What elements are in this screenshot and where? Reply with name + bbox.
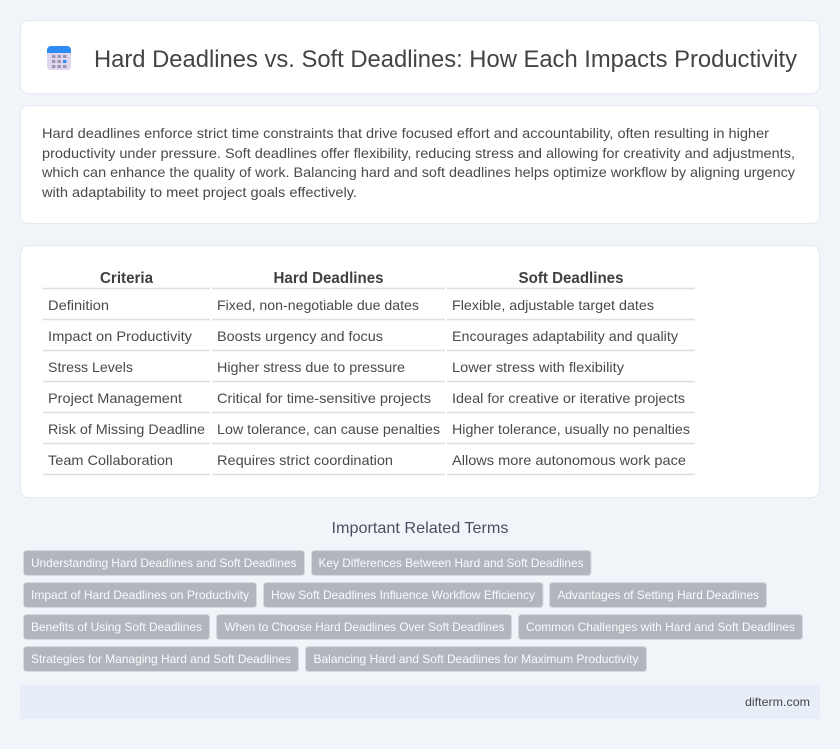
tag <box>216 614 512 640</box>
tag: Impact of Hard Deadlines on Productivity <box>31 588 249 602</box>
footer: site name: difterm.com <box>745 695 810 709</box>
row: stress levels <box>48 359 624 375</box>
tag: Strategies for Managing Hard and Soft Deadlines <box>31 652 291 666</box>
title: Hard Deadlines vs. Soft Deadlines: How Each Impacts Productivity <box>94 46 797 73</box>
row: impact on productivity: Encourages adaptability and quality <box>452 328 678 344</box>
row: risk of missing deadline: Risk of Missing Deadline <box>48 421 205 437</box>
tag <box>24 550 304 576</box>
row: risk of missing deadline: Higher tolerance, usually no penalties <box>452 421 690 437</box>
tag: Balancing Hard and Soft Deadlines for Maximum Productivity <box>314 652 638 666</box>
row: impact on productivity <box>48 328 678 344</box>
tag <box>24 614 210 640</box>
tag <box>24 646 298 672</box>
tag: Common Challenges with Hard and Soft Deadlines <box>526 620 795 634</box>
row: definition: Fixed, non-negotiable due dates <box>217 297 419 313</box>
row: definition: Flexible, adjustable target dates <box>452 297 654 313</box>
footer band <box>20 685 820 719</box>
panel: intro paragraph: Hard deadlines enforce strict time constraints that drive focused effort and accountability, often resulting in higher <box>42 125 769 141</box>
panel: intro paragraph: with adaptability to meet project goals effectively. <box>41 184 357 200</box>
tag: How Soft Deadlines Influence Workflow Efficiency <box>271 588 535 602</box>
row: risk of missing deadline: Low tolerance, can cause penalties <box>217 421 440 437</box>
row: project management: Ideal for creative or iterative projects <box>452 390 685 406</box>
related term tags <box>24 550 802 672</box>
row: team collaboration: Allows more autonomous work pace <box>452 452 686 468</box>
tag <box>24 582 256 608</box>
tag <box>550 582 766 608</box>
icon: calendar <box>47 46 71 70</box>
row: stress levels: Stress Levels <box>48 359 133 375</box>
panel: intro paragraph: productivity under pressure. Soft deadlines offer flexibility, reducing stress and allowing for creativity and adjustments, <box>42 145 795 161</box>
panel: intro paragraph: which can enhance the quality of work. Balancing hard and soft deadlines helps optimize workflow by aligning urgency <box>41 164 795 180</box>
heading: important related terms: Important Related Terms <box>332 520 508 537</box>
row: team collaboration: Team Collaboration <box>48 452 173 468</box>
tag: Understanding Hard Deadlines and Soft Deadlines <box>31 556 296 570</box>
row: project management: Project Management <box>48 390 182 406</box>
tag: Advantages of Setting Hard Deadlines <box>558 588 759 602</box>
table header: Soft Deadlines <box>518 270 624 287</box>
row: impact on productivity: Impact on Productivity <box>48 328 192 344</box>
tag <box>312 550 591 576</box>
table header <box>100 270 624 287</box>
row: stress levels: Lower stress with flexibility <box>452 359 624 375</box>
row: project management: Critical for time-sensitive projects <box>217 390 431 406</box>
table header: Hard Deadlines <box>274 270 384 287</box>
tag <box>264 582 543 608</box>
tag: Key Differences Between Hard and Soft Deadlines <box>318 556 584 570</box>
row: team collaboration: Requires strict coordination <box>217 452 393 468</box>
tag: When to Choose Hard Deadlines Over Soft Deadlines <box>224 620 504 634</box>
tag <box>518 614 802 640</box>
tag <box>306 646 646 672</box>
panel: comparison table <box>20 246 820 498</box>
row: impact on productivity: Boosts urgency and focus <box>217 328 383 344</box>
table header: Criteria <box>100 270 153 287</box>
row: risk of missing deadline <box>48 421 690 437</box>
row: stress levels: Higher stress due to pressure <box>217 359 405 375</box>
row: project management <box>48 390 685 406</box>
panel: intro paragraph <box>20 106 820 224</box>
row: definition: Definition <box>48 297 109 313</box>
row: definition <box>48 297 654 313</box>
row: team collaboration <box>48 452 686 468</box>
header panel <box>20 20 820 94</box>
tag: Benefits of Using Soft Deadlines <box>31 620 202 634</box>
